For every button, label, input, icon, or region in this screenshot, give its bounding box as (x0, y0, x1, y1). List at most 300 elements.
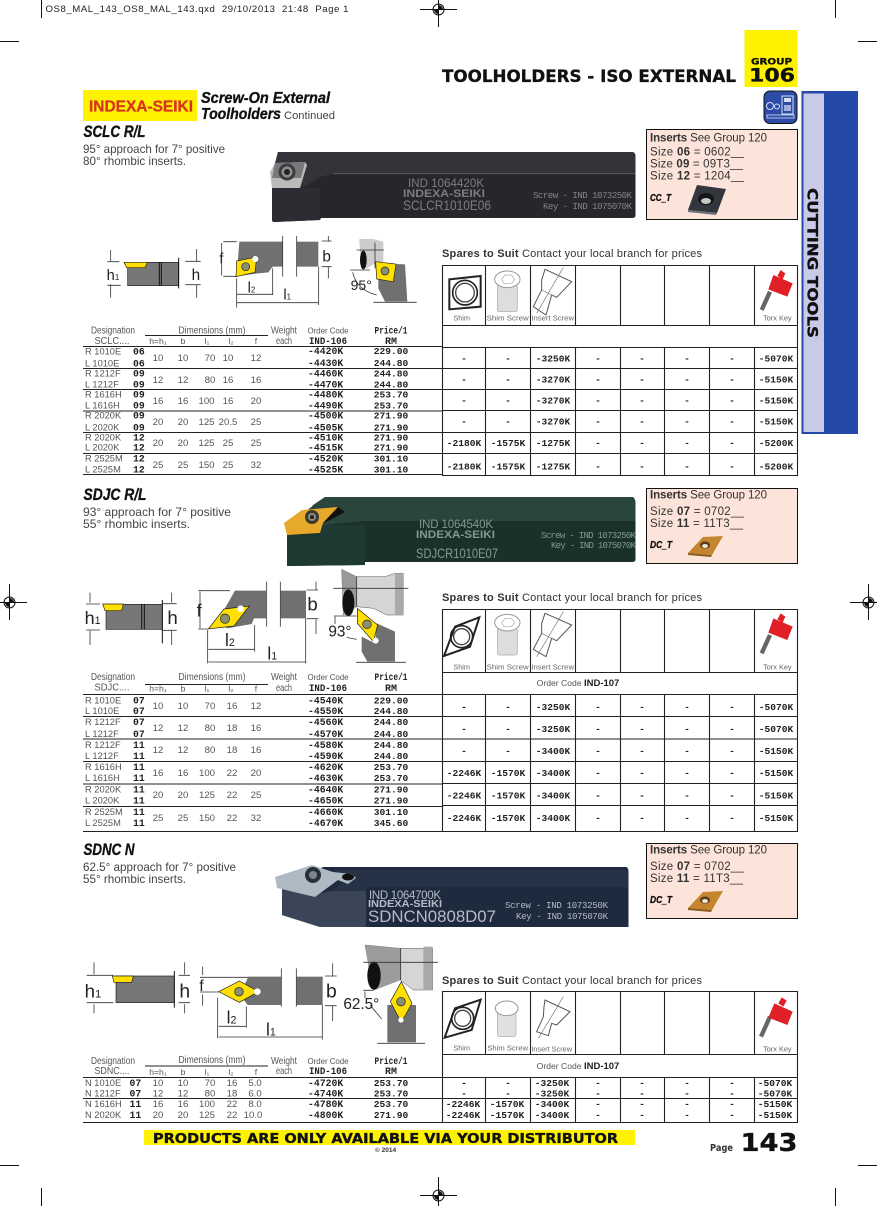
table: SCLC spares: -3250K (536, 354, 571, 364)
table: SCLC spares: - (684, 416, 690, 428)
table: SDJC designation and prices: 25 (178, 813, 188, 824)
table: SDJC designation and prices: 10 (178, 701, 188, 712)
table: SCLC designation and prices: R 1212F (85, 368, 121, 378)
photo: SDNC toolholder (275, 865, 628, 927)
table: SDJC spares: - (461, 702, 467, 713)
SECTION 2 heading: SDJC R/L (84, 486, 146, 504)
table: SDJC designation and prices: Designation (91, 672, 135, 683)
section heading: screw-on external toolholders: Continued (284, 110, 335, 122)
table: SCLC designation and prices: 12 (178, 375, 188, 386)
table: SDNC spares: -5070K (758, 1078, 793, 1089)
diagram: SDJC dimension drawings: h (167, 607, 178, 628)
table: SDNC spares: - (639, 1110, 645, 1121)
table: SDJC spares: - (729, 768, 735, 779)
table: SCLC spares: -3270K (536, 396, 571, 406)
table: SCLC spares: -5070K (759, 354, 794, 364)
table: SCLC designation and prices: L 1616H (85, 400, 120, 410)
table: SCLC designation and prices: -4490K (308, 400, 343, 412)
table: SCLC spares: - (639, 438, 645, 449)
diagram: SDJC dimension drawings: l2 (225, 630, 235, 650)
spare part icons: shim, screws, torx key: Shim (453, 1044, 470, 1053)
table: SDNC spares: -5150K (758, 1099, 793, 1110)
brand logo: Indexa-Seiki: INDEXA-SEIKI (89, 98, 193, 116)
table: SDNC designation and prices: Weight (271, 1056, 297, 1067)
table: SCLC spares: - (595, 438, 601, 449)
table: SDJC spares: -5070K (759, 702, 794, 713)
brand logo: Indexa-Seiki (83, 90, 197, 121)
table: SDJC designation and prices: 11 (133, 762, 145, 773)
table: SCLC designation and prices: 301.10 (374, 464, 409, 476)
table: SCLC designation and prices: R 1616H (85, 390, 122, 400)
table: SCLC spares: -1575K (491, 438, 526, 449)
inserts box: CC_T: Size 09 = 09T3__ (650, 158, 744, 170)
table: SCLC spares: -2180K (447, 462, 482, 472)
table: SCLC designation and prices: 244.80 (374, 358, 409, 369)
table: SDJC designation and prices: 11 (133, 796, 145, 806)
table: SCLC spares: -1275K (536, 438, 571, 449)
table: SCLC spares: - (639, 374, 645, 386)
table: SCLC designation and prices: 10 (153, 353, 163, 364)
table: SDJC spares: - (461, 724, 467, 735)
table: SDNC designation and prices: 100 (199, 1099, 215, 1110)
spare part icons: shim, screws, torx key: Insert Screw (531, 313, 575, 322)
table: SDNC spares: -5150K (758, 1110, 793, 1121)
table: SCLC designation and prices: L 1212F (85, 380, 119, 390)
table: SCLC spares: - (595, 354, 601, 364)
photo: SDNC toolholder: IND 1064700K (369, 890, 441, 902)
table: SCLC spares: -5150K (759, 416, 794, 428)
table: SDJC designation and prices: L 1010E (85, 706, 119, 716)
table: SDJC designation and prices: b (181, 684, 186, 694)
diagram: SCLC dimension drawings: l2 (248, 280, 256, 296)
table: SCLC designation and prices: 70 (205, 353, 215, 364)
diagram: SDNC dimension drawings: h (179, 981, 190, 1002)
table: SCLC spares: -2180K (447, 438, 482, 449)
table: SDJC designation and prices: 12 (153, 723, 163, 734)
table: SDJC spares: - (729, 790, 735, 802)
table: SCLC spares: -5150K (759, 396, 794, 406)
table: SCLC designation and prices: 12 (251, 353, 261, 364)
table: SDJC spares: -3250K (536, 724, 571, 735)
table: SCLC designation and prices: 271.90 (374, 432, 409, 444)
table: SDJC designation and prices: Dimensions (mm) (178, 672, 246, 683)
table: SDJC designation and prices: 07 (133, 729, 145, 740)
table: SDJC designation and prices: 345.60 (374, 818, 409, 829)
table: SDJC designation and prices: 244.80 (374, 717, 409, 728)
table: SDNC designation and prices: 80 (205, 1088, 215, 1100)
copyright: © 2014 (375, 1146, 396, 1154)
SCLC description: 95° approach for 7° positive (83, 143, 225, 156)
table: SCLC spares: - (639, 396, 645, 406)
table: SCLC spares: - (684, 396, 690, 406)
table: SCLC spares: -3270K (536, 374, 571, 386)
table: SCLC designation and prices: 20 (178, 438, 188, 449)
table: SDNC designation and prices: 07 (130, 1088, 141, 1100)
table: SDJC spares: - (595, 724, 601, 735)
table: SCLC designation and prices: -4420K (308, 346, 343, 357)
inserts box: DC_T (section 2) (646, 488, 798, 564)
table: SCLC spares: -1575K (491, 462, 526, 472)
photo: SDNC toolholder: INDEXA-SEIKI (368, 899, 442, 910)
table: SCLC designation and prices: IND-106 (309, 337, 347, 348)
table: SDJC designation and prices: L 2525M (85, 818, 121, 828)
spare part icons: shim, screws, torx key: Torx Key (763, 662, 792, 671)
table: SDJC designation and prices: L 1616H (85, 773, 120, 783)
table: SDJC spares: -3400K (536, 746, 571, 757)
table: SDJC spares: - (729, 724, 735, 735)
table: SDNC spares: - (729, 1110, 735, 1121)
section heading: screw-on external toolholders: Toolholders (201, 106, 281, 123)
table: SDNC designation and prices: Designation (91, 1056, 135, 1067)
table: SCLC designation and prices: 125 (198, 438, 215, 449)
diagram: SDNC dimension drawings: 62.5° (343, 996, 379, 1013)
table: SDJC designation and prices: h=h₁ (149, 684, 167, 694)
table: SDNC designation and prices: 253.70 (374, 1078, 409, 1089)
table: SCLC spares: - (684, 438, 690, 449)
inserts box: DC_T (section 3) (646, 844, 798, 918)
table: SCLC designation and prices: 32 (251, 460, 261, 471)
table: SCLC designation and prices: -4510K (308, 432, 343, 444)
diagram: SDNC dimension drawings (85, 945, 438, 1043)
table: SCLC designation and prices: 09 (133, 422, 145, 434)
inserts box: CC_T: Size 12 = 1204__ (650, 170, 745, 182)
spare part icons: shim, screws, torx key: Shim Screw (487, 662, 529, 671)
table: SDJC designation and prices: 150 (199, 813, 215, 824)
table: SCLC designation and prices: f (255, 336, 258, 346)
table: SDNC designation and prices: l₂ (228, 1067, 234, 1077)
table: SDJC designation and prices: 12 (153, 745, 163, 756)
table: SDJC designation and prices: -4620K (308, 762, 343, 773)
table: SDNC designation and prices: 10 (178, 1078, 188, 1089)
table: SDJC designation and prices: R 1212F (85, 740, 121, 750)
table: SDJC designation and prices: 16 (227, 701, 237, 712)
table: SCLC spares: - (595, 416, 601, 428)
table: SDJC designation and prices: R 2020K (85, 784, 122, 794)
diagram: SDNC dimension drawings: l1 (266, 1020, 276, 1040)
spare part icons: shim, screws, torx key (444, 612, 793, 671)
table: SDJC designation and prices: -4670K (308, 818, 343, 829)
table: SDJC designation and prices: 18 (227, 723, 237, 734)
table: SDNC designation and prices (83, 1055, 443, 1122)
photo: SDNC toolholder: Key - IND 1075070K (516, 912, 609, 922)
table: SCLC spares: -5200K (759, 462, 794, 472)
spare part icons: shim, screws, torx key: Insert Screw (531, 662, 575, 671)
table: SDNC designation and prices: N 1010E (85, 1078, 121, 1088)
table: SCLC designation and prices: 271.90 (374, 422, 409, 434)
table: SDNC designation and prices: f (255, 1067, 258, 1077)
table: SDNC spares: -3400K (535, 1110, 570, 1121)
table: SDNC designation and prices: Order Code (308, 1056, 349, 1066)
table: SDNC designation and prices: l₁ (205, 1067, 210, 1077)
table: SDJC spares: -3250K (536, 702, 571, 713)
SECTION 3 heading: SDNC N (84, 841, 135, 859)
table: SDJC spares: - (639, 813, 645, 824)
table: SDJC designation and prices: each (276, 683, 292, 694)
table: SDJC designation and prices: 80 (205, 723, 215, 734)
table: SDJC designation and prices: -4650K (308, 796, 343, 806)
table: SDNC spares: - (505, 1088, 511, 1100)
table: SDNC designation and prices: 18 (227, 1088, 237, 1100)
table: SCLC designation and prices: 253.70 (374, 400, 409, 412)
table: SDNC spares: - (639, 1088, 645, 1100)
spares heading: SDJC: Spares to Suit Contact your local branch for prices (442, 592, 702, 604)
table: SDNC designation and prices: 20 (178, 1110, 188, 1121)
table: SDJC spares: -3400K (536, 790, 571, 802)
table: SCLC designation and prices: 20.5 (219, 417, 237, 428)
table: SCLC spares: - (684, 374, 690, 386)
table: SDNC designation and prices: Price/1 (374, 1056, 408, 1068)
table: SCLC designation and prices: 25 (153, 460, 163, 471)
diagram: SDJC dimension drawings: b (307, 594, 318, 615)
table: SDJC spares: - (684, 768, 690, 779)
SECTION 1 heading: SCLC R/L (84, 123, 146, 141)
table: SDJC designation and prices: 07 (133, 696, 145, 706)
table: SDNC designation and prices: 11 (130, 1110, 141, 1121)
table: SDNC spares: - (639, 1099, 645, 1110)
table: SDNC designation and prices: 8.0 (248, 1099, 262, 1110)
table: SDJC spares (442, 610, 798, 832)
table: SCLC designation and prices: 09 (133, 410, 145, 422)
spares heading: SDNC: Spares to Suit Contact your local branch for prices (442, 975, 702, 987)
table: SCLC designation and prices: 271.90 (374, 410, 409, 422)
table: SCLC designation and prices: 271.90 (374, 442, 409, 454)
table: SDNC spares: - (505, 1078, 511, 1089)
table: SDJC designation and prices: 11 (133, 773, 145, 784)
table: SCLC spares: - (639, 354, 645, 364)
table: SCLC spares: -3270K (536, 416, 571, 428)
diagram: SDJC dimension drawings: h1 (85, 608, 101, 628)
group badge: GROUP (751, 56, 792, 68)
table: SCLC spares (442, 266, 798, 476)
table: SDJC designation and prices: -4580K (308, 740, 343, 751)
table: SDNC designation and prices: -4740K (308, 1088, 343, 1100)
table: SDJC designation and prices: f (255, 684, 258, 694)
table: SCLC spares: - (461, 396, 467, 406)
table: SDJC spares: - (639, 790, 645, 802)
table: SDJC spares: - (729, 702, 735, 713)
table: SDNC designation and prices: 12 (153, 1088, 163, 1100)
table: SDNC designation and prices: each (276, 1066, 292, 1077)
table: SDJC spares: - (595, 768, 601, 779)
table: SDJC designation and prices: -4550K (308, 706, 343, 717)
table: SCLC designation and prices: Price/1 (374, 326, 408, 338)
table: SDNC designation and prices: 253.70 (374, 1088, 409, 1100)
table: SDJC designation and prices: -4640K (308, 784, 343, 796)
table: SDNC designation and prices: 12 (178, 1088, 188, 1100)
table: SCLC designation and prices: 244.80 (374, 368, 409, 380)
spare part icons: shim, screws, torx key: Shim Screw (487, 1044, 529, 1053)
spares heading: SCLC: Spares to Suit Contact your local branch for prices (442, 248, 702, 260)
table: SCLC designation and prices: -4460K (308, 368, 343, 380)
table: SCLC designation and prices: -4505K (308, 422, 343, 434)
table: SCLC designation and prices: SCLC.... (94, 336, 130, 347)
photo: SDJC toolholder (284, 497, 637, 566)
table: SDJC designation and prices: 32 (251, 813, 261, 824)
table: SDJC designation and prices: 20 (178, 790, 188, 801)
table: SDJC spares: - (595, 813, 601, 824)
SDJC description: 93° approach for 7° positive (83, 506, 231, 519)
table: SDNC spares: - (595, 1099, 601, 1110)
table: SCLC designation and prices: 10 (178, 353, 188, 364)
table: SCLC designation and prices: 25 (223, 460, 233, 471)
spare part icons: shim, screws, torx key: Shim Screw (487, 313, 529, 322)
table: SCLC spares: - (729, 462, 735, 472)
table: SDJC spares: - (595, 702, 601, 713)
table: SDNC spares: - (461, 1088, 467, 1100)
table: SCLC spares: -1275K (536, 462, 571, 472)
diagram: SCLC dimension drawings: l1 (283, 287, 292, 303)
table: SDNC designation and prices: 253.70 (374, 1099, 409, 1110)
table: SCLC spares: - (684, 462, 690, 472)
table: SCLC designation and prices: 100 (198, 396, 215, 407)
table: SCLC spares: - (729, 374, 735, 386)
diagram: SDJC dimension drawings: 93° (328, 624, 352, 641)
table: SCLC spares: - (461, 416, 467, 428)
spare part icons: shim, screws, torx key: Torx Key (763, 313, 792, 322)
table: SDNC designation and prices: 11 (130, 1099, 141, 1110)
table: SDNC spares: -2246K (446, 1099, 481, 1110)
table: SDJC spares: - (505, 702, 511, 713)
table: SDJC designation and prices: 11 (133, 807, 145, 818)
SDNC description: 55° rhombic inserts. (83, 873, 186, 886)
table: SDNC spares: - (729, 1099, 735, 1110)
table: SDJC spares: -2246K (447, 790, 482, 802)
table: SDJC spares: - (595, 790, 601, 802)
table: SDNC spares: - (595, 1088, 601, 1100)
table: SDJC designation and prices: 25 (153, 813, 163, 824)
spare part icons: shim, screws, torx key: Shim (453, 662, 470, 671)
table: SDJC spares: - (639, 724, 645, 735)
table: SDJC designation and prices: -4540K (308, 696, 343, 706)
table: SCLC designation and prices: l₁ (205, 336, 210, 346)
table: SDNC designation and prices: 16 (153, 1099, 163, 1110)
table: SCLC designation and prices: -4500K (308, 410, 343, 422)
table: SDJC designation and prices: L 1212F (85, 729, 119, 739)
table: SCLC designation and prices: 25 (251, 417, 261, 428)
table: SDJC designation and prices: Weight (271, 672, 297, 683)
table: SCLC designation and prices: l₂ (228, 336, 234, 346)
SCLC description (83, 143, 225, 168)
table: SDJC designation and prices: Price/1 (374, 672, 408, 684)
table: SDNC spares: - (684, 1110, 690, 1121)
table: SDJC designation and prices: 20 (153, 790, 163, 801)
table: SDNC designation and prices: 22 (227, 1110, 237, 1121)
table: SCLC designation and prices: -4470K (308, 380, 343, 390)
table: SDJC designation and prices: 16 (178, 768, 188, 779)
table: SDJC designation and prices: 25 (251, 790, 261, 801)
table: SDNC designation and prices: 22 (227, 1099, 237, 1110)
side tab: cutting tools: CUTTING TOOLS (804, 188, 820, 338)
table: SDJC spares: -5150K (759, 746, 794, 757)
table: SDJC designation and prices: 100 (199, 768, 215, 779)
diagram: SCLC dimension drawings: b (322, 249, 331, 266)
table: SCLC designation and prices: -4520K (308, 454, 343, 464)
table: SDJC designation and prices: IND-106 (309, 684, 347, 695)
table: SCLC designation and prices: 09 (133, 400, 145, 412)
table: SCLC spares: - (461, 354, 467, 364)
table: SCLC spares: - (595, 374, 601, 386)
photo: SCLC toolholder (270, 152, 636, 222)
table: SCLC designation and prices: h=h₁ (149, 336, 167, 346)
table: SDJC designation and prices: 11 (133, 784, 145, 796)
table: SDJC spares: - (729, 746, 735, 757)
table: SDNC designation and prices: N 1616H (85, 1099, 122, 1109)
distributor banner: PRODUCTS ARE ONLY AVAILABLE VIA YOUR DISTRIBUTOR (153, 1132, 618, 1147)
table: SDJC spares: -3400K (536, 813, 571, 824)
photo: SDJC toolholder: Key - IND 1075070K (551, 541, 637, 551)
spare part icons: shim, screws, torx key: Shim (453, 313, 470, 322)
table: SCLC designation and prices: 16 (223, 396, 233, 407)
table: SDNC designation and prices: N 1212F (85, 1088, 121, 1098)
page number: Page (710, 1143, 733, 1154)
inserts box: DC_T (section 2): Inserts See Group 120 (650, 490, 767, 502)
table: SDNC designation and prices: 16 (178, 1099, 188, 1110)
table: SCLC designation and prices: b (181, 336, 186, 346)
table: SDJC designation and prices: 271.90 (374, 796, 409, 806)
table: SDJC spares: - (684, 790, 690, 802)
table: SCLC spares: - (729, 396, 735, 406)
table: SCLC spares: -5150K (759, 374, 794, 386)
SDNC description: 62.5° approach for 7° positive (83, 861, 236, 874)
inserts box: CC_T (646, 130, 798, 220)
table: SCLC spares: - (505, 374, 511, 386)
table: SDJC designation and prices: Order Code (308, 672, 349, 682)
table: SDJC designation and prices: -4570K (308, 729, 343, 740)
photo: SDJC toolholder: INDEXA-SEIKI (416, 529, 495, 541)
diagram: SCLC dimension drawings: 95° (351, 277, 372, 293)
inserts box: DC_T (section 2): Size 11 = 11T3__ (650, 518, 744, 530)
table: SDNC designation and prices: 10 (153, 1078, 163, 1089)
table: SDJC designation and prices: 16 (251, 745, 261, 756)
table: SDJC designation and prices: 229.00 (374, 696, 409, 706)
table: SDNC designation and prices: SDNC.... (94, 1066, 130, 1077)
inserts box: DC_T (section 3): DC_T (650, 895, 673, 906)
table: SCLC designation and prices: R 2020K (85, 410, 122, 420)
table: SDNC spares: - (684, 1078, 690, 1089)
table: SCLC spares: - (505, 354, 511, 364)
table: SDNC designation and prices: RM (385, 1067, 397, 1078)
table: SDJC spares: - (684, 702, 690, 713)
table: SCLC designation and prices: R 1010E (85, 346, 121, 356)
inserts box: CC_T: CC_T (650, 193, 672, 204)
diagram: SDJC dimension drawings: f (197, 601, 203, 621)
table: SDNC spares: -1570K (490, 1099, 525, 1110)
table: SDJC spares: - (684, 813, 690, 824)
table: SCLC designation and prices: -4515K (308, 442, 343, 454)
table: SDNC designation and prices: 6.0 (248, 1088, 262, 1100)
table: SDJC designation and prices: 12 (178, 723, 188, 734)
spare part icons: shim, screws, torx key (445, 997, 793, 1053)
table: SDNC spares: -3400K (535, 1099, 570, 1110)
table: SDJC designation and prices: 244.80 (374, 729, 409, 740)
inserts box: CC_T: Size 06 = 0602__ (650, 146, 745, 158)
table: SCLC designation and prices: -4430K (308, 358, 343, 369)
table: SDJC spares: -3400K (536, 768, 571, 779)
table: SDJC spares: - (639, 768, 645, 779)
table: SCLC designation and prices: 80 (205, 375, 215, 386)
table: SCLC designation and prices: 20 (153, 417, 163, 428)
table: SCLC designation and prices: 10 (223, 353, 233, 364)
inserts box: DC_T (section 2): Size 07 = 0702__ (650, 506, 745, 518)
table: SDJC designation and prices: 18 (227, 745, 237, 756)
photo: SCLC toolholder: Key - IND 1075070K (543, 202, 633, 212)
table: SCLC designation and prices: 253.70 (374, 390, 409, 400)
table: SDNC spares: - (461, 1078, 467, 1089)
table: SDJC designation and prices: 12 (251, 701, 261, 712)
table: SDJC designation and prices: 11 (133, 751, 145, 762)
diagram: SCLC dimension drawings: f (219, 251, 224, 267)
table: SDJC designation and prices: 244.80 (374, 706, 409, 717)
